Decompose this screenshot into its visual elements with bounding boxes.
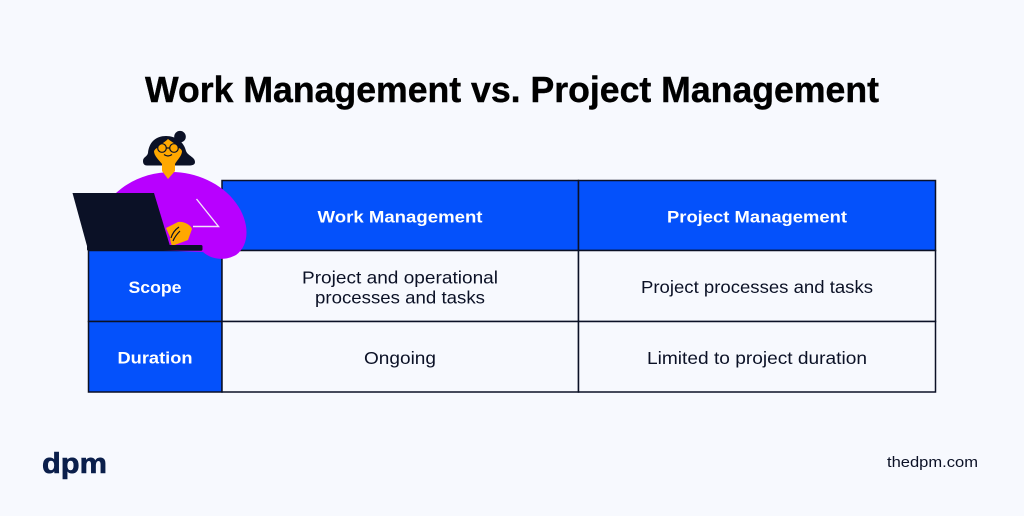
- row header: Duration: Duration: [118, 348, 192, 368]
- cell: Scope, Project Management: [578, 250, 936, 322]
- cell: Scope, Work Management: Project and operational: [302, 268, 498, 288]
- cell: Duration, Project Management: [578, 322, 936, 392]
- icon: hair: [143, 136, 195, 166]
- cell: Duration, Project Management: Limited to project duration: [647, 348, 867, 368]
- cell: Duration, Work Management: [222, 322, 578, 392]
- row header: Scope: [88, 250, 222, 322]
- header cell: Work Management: Work Management: [318, 208, 483, 226]
- logo: dpm: dpm: [42, 448, 107, 480]
- icon: laptop base: [87, 245, 202, 251]
- header cell: Work Management: [222, 180, 578, 250]
- website: thedpm.com: thedpm.com: [887, 455, 978, 471]
- title: Work Management vs. Project Management: [145, 69, 879, 110]
- header cell: Project Management: [578, 180, 936, 250]
- icon: purple body: [116, 172, 246, 259]
- cell: Scope, Project Management: Project processes and tasks: [641, 277, 873, 297]
- icon: face and neck: [154, 139, 182, 179]
- cell: Scope, Work Management: [222, 250, 578, 322]
- icon: glasses: [154, 144, 182, 156]
- cell: Scope, Work Management: processes and tasks: [315, 288, 485, 308]
- icon: fingers: [171, 227, 180, 241]
- illustration: person at laptop: [72, 131, 246, 259]
- icon: laptop screen: [72, 193, 170, 246]
- header cell: Project Management: Project Management: [667, 208, 847, 226]
- row header: Scope: Scope: [128, 278, 182, 297]
- icon: arm outline: [193, 199, 218, 226]
- icon: hand: [166, 222, 192, 246]
- row header: Duration: [88, 322, 222, 392]
- icon: hair bun: [174, 131, 186, 142]
- comparison table: [88, 180, 936, 392]
- cell: Duration, Work Management: Ongoing: [364, 348, 436, 368]
